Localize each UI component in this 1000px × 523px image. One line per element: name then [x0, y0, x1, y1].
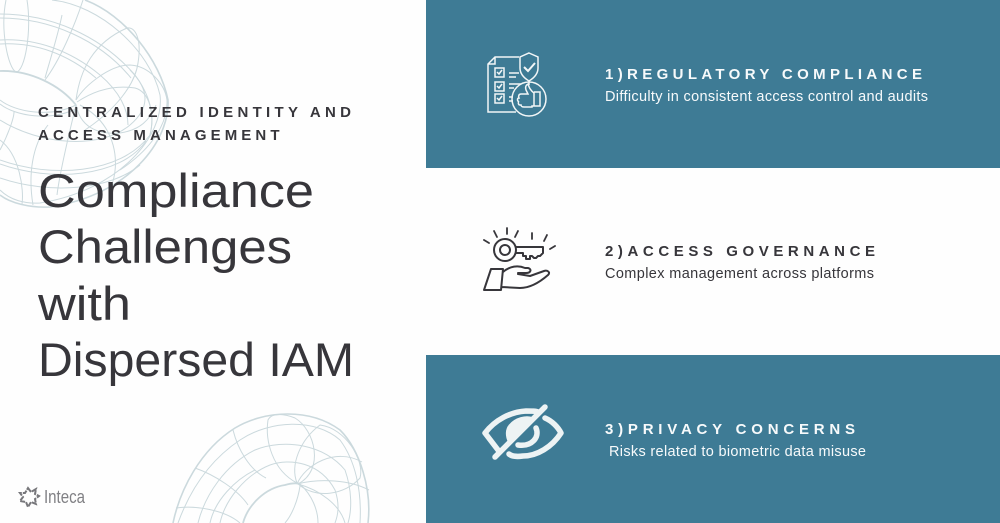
icon: key over hand: [484, 228, 555, 290]
main title: Dispersed IAM: [38, 333, 354, 386]
main title: [37, 164, 354, 386]
icon: checklist with shield and thumbs up: [488, 53, 546, 116]
kicker heading: CENTRALIZED IDENTITY AND: [38, 104, 351, 121]
icon: logo star: [20, 488, 39, 507]
main title: Compliance: [38, 164, 314, 217]
logo: Inteca: Inteca: [44, 487, 86, 507]
description: Complex management across platforms: [605, 266, 874, 282]
heading: 1)REGULATORY COMPLIANCE: [605, 66, 922, 83]
icon: crossed-out eye: [485, 407, 561, 457]
logo: Inteca: [20, 487, 86, 507]
kicker heading: [38, 104, 351, 144]
kicker heading: ACCESS MANAGEMENT: [38, 127, 280, 144]
panel: access governance: [484, 228, 875, 290]
decorative torus: top left: [0, 0, 168, 207]
main title: with: [37, 277, 131, 330]
description: Difficulty in consistent access control and audits: [605, 89, 928, 105]
description: Risks related to biometric data misuse: [609, 444, 866, 460]
main title: Challenges: [38, 220, 292, 273]
heading: 3)PRIVACY CONCERNS: [605, 421, 855, 438]
decorative torus: bottom centre: [173, 414, 369, 523]
heading: 2)ACCESS GOVERNANCE: [605, 243, 875, 260]
panel: regulatory compliance: [426, 0, 1000, 168]
panel: privacy concerns: [426, 355, 1000, 523]
